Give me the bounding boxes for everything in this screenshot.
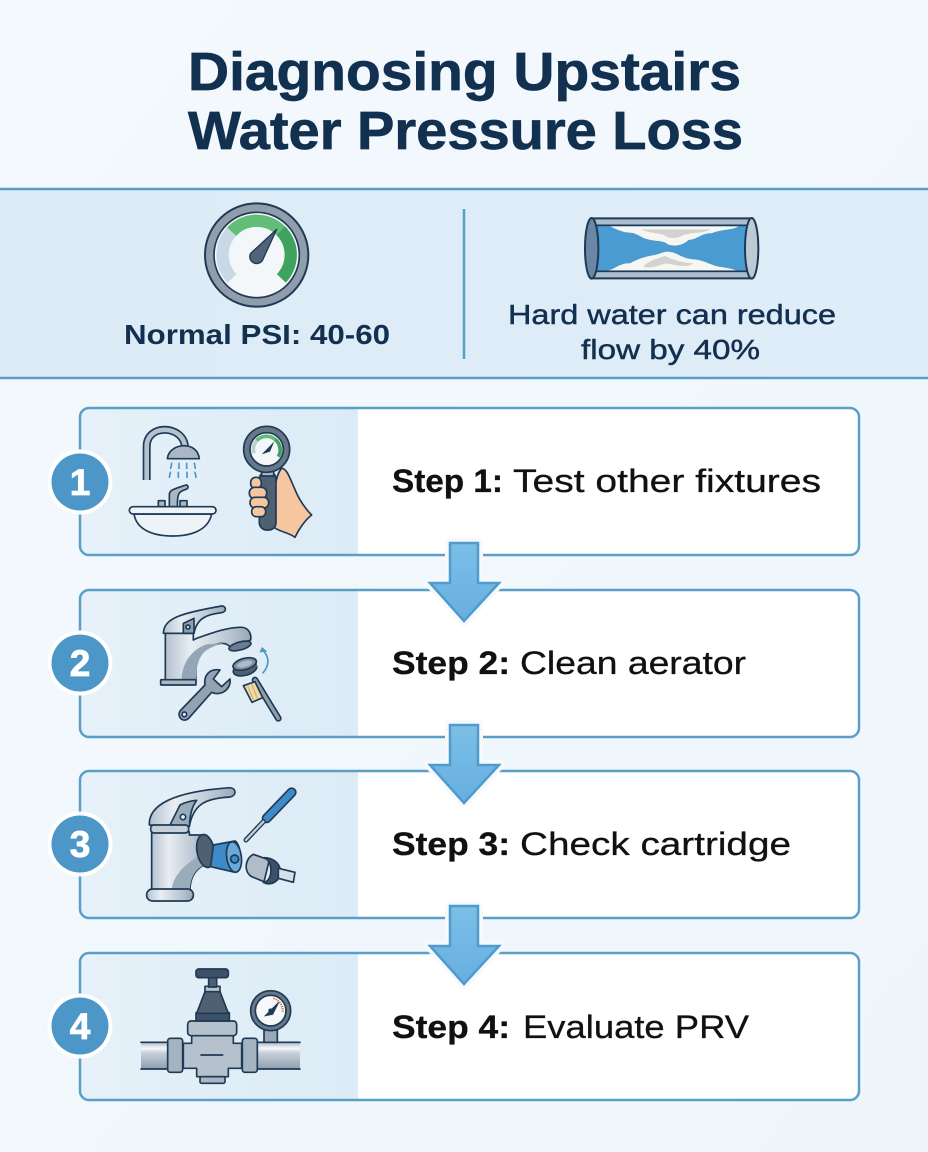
icon: shower, sink and gauge — [129, 426, 312, 537]
stats band — [0, 189, 928, 378]
label: hard water: flow by 40% — [581, 334, 760, 365]
badge 4: 4 — [70, 1006, 91, 1047]
stat: normal PSI — [124, 203, 390, 350]
step 1 text — [392, 463, 821, 499]
badge 3 — [48, 812, 112, 876]
icon: pressure reducing valve with gauge — [141, 969, 300, 1083]
badge 1 — [48, 450, 112, 514]
step 4 text: Evaluate PRV — [523, 1009, 750, 1045]
label: hard water — [508, 299, 836, 365]
stat: hard water — [508, 218, 836, 365]
step 3 card — [48, 771, 859, 918]
step 1 card — [48, 408, 859, 555]
step 3 text: Step 3: — [392, 826, 510, 862]
badge 3: 3 — [70, 824, 90, 865]
label: hard water: Hard water can reduce — [508, 299, 836, 330]
step 4 card — [48, 953, 859, 1100]
icon: faucet, aerator, wrench and brush — [161, 606, 278, 720]
badge 4 — [48, 994, 112, 1058]
step 4 text: Step 4: — [392, 1009, 510, 1045]
step 1 text: Test other fixtures — [513, 463, 821, 499]
step 4 text — [392, 1009, 750, 1045]
icon: faucet, cartridge and screwdriver — [147, 788, 295, 901]
step 1 text: Step 1: — [392, 463, 503, 499]
step 3 text: Check cartridge — [520, 826, 791, 862]
title: Water Pressure Loss — [188, 101, 743, 161]
title — [188, 42, 743, 161]
icon: pressure gauge — [205, 203, 308, 307]
title: Diagnosing Upstairs — [188, 42, 741, 102]
step 2 text — [392, 645, 746, 681]
step 2 card — [48, 590, 859, 737]
step 3 text — [392, 826, 791, 862]
step 2 text: Clean aerator — [520, 645, 746, 681]
arrow: step 1 to 2 — [430, 543, 499, 621]
badge 1: 1 — [70, 462, 90, 503]
badge 2: 2 — [70, 643, 90, 684]
step 2 text: Step 2: — [392, 645, 510, 681]
label: normal PSI: Normal PSI: 40-60 — [124, 319, 390, 350]
arrow: step 3 to 4 — [430, 906, 499, 984]
badge 2 — [48, 630, 112, 696]
icon: scaled pipe — [585, 218, 758, 279]
arrow: step 2 to 3 — [430, 725, 499, 803]
